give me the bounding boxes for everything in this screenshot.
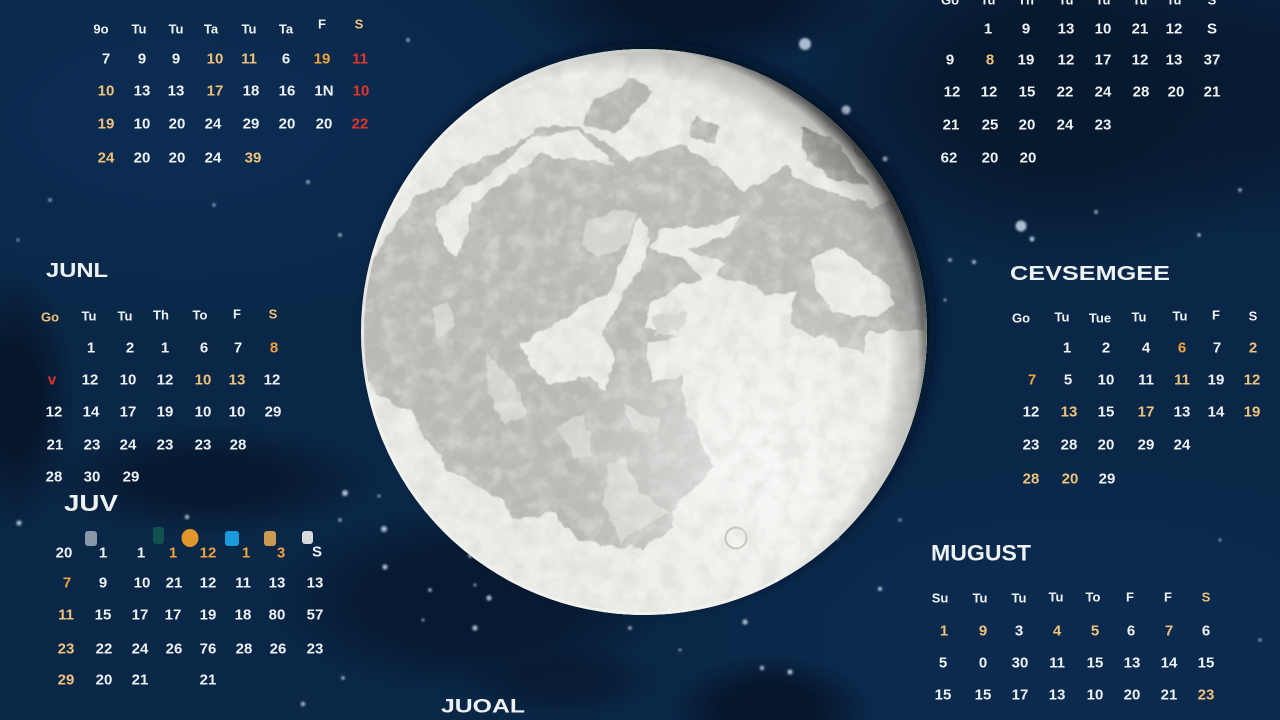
moon: [361, 49, 927, 615]
calendar: top left: S: [355, 16, 364, 32]
calendar: August: 9: [979, 622, 987, 640]
calendar: top right: 23: [1095, 116, 1111, 134]
calendar: September: 19: [1208, 372, 1224, 388]
calendar: July: 28: [236, 640, 252, 658]
calendar: July: 21: [166, 574, 182, 592]
calendar: top right: 17: [1095, 52, 1111, 68]
bright highlands and rays: [365, 49, 927, 615]
month title: MUGUST: [931, 540, 1032, 566]
calendar: September: Go: [1012, 310, 1030, 326]
bright left rim: [362, 50, 926, 614]
calendar: September: [1010, 263, 1260, 488]
surface mottling: [360, 48, 930, 618]
calendar: July: 12: [200, 574, 216, 592]
calendar: September: Tu: [1173, 308, 1188, 324]
calendar: July: 24: [132, 640, 149, 658]
calendar: August: 10: [1087, 686, 1103, 704]
calendar: top left: 6: [282, 50, 290, 68]
calendar: July: 21: [200, 672, 216, 688]
calendar: August: To: [1086, 590, 1101, 604]
calendar: top right: 28: [1133, 84, 1149, 100]
calendar: top left: 24: [98, 150, 115, 166]
calendar: July: 10: [134, 574, 150, 592]
calendar: June: S: [269, 306, 278, 322]
bright centre of highlands: [608, 323, 856, 560]
calendar: August: 6: [1127, 622, 1135, 640]
calendar: top right: 19: [1018, 52, 1034, 68]
calendar: August: 21: [1161, 686, 1177, 704]
month title: JUV: [64, 490, 119, 516]
calendar: June: Tu: [118, 308, 133, 324]
calendar: July: 1: [242, 544, 250, 562]
calendar: July: 20: [96, 672, 112, 688]
calendar: September: 1: [1063, 340, 1071, 356]
calendar: July: 13: [269, 574, 285, 592]
calendar: September: 29: [1138, 436, 1154, 454]
calendar: top left: F: [318, 16, 326, 32]
calendar: July: 57: [307, 606, 323, 624]
calendar: August: 20: [1124, 686, 1140, 704]
calendar: August: Tu: [973, 590, 988, 606]
calendar: June: 6: [200, 340, 208, 356]
calendar: top left: 9o: [93, 22, 109, 36]
calendar: September: 11: [1174, 372, 1190, 388]
calendar: June: 10: [120, 372, 136, 388]
calendar: top left: 20: [316, 116, 332, 132]
calendar: top left: Ta: [204, 22, 219, 36]
calendar: top left: 7: [102, 50, 110, 68]
calendar: June: 12: [157, 372, 173, 388]
calendar: September: 24: [1174, 436, 1191, 454]
calendar: August: 11: [1049, 654, 1065, 672]
calendar: September: Tue: [1089, 310, 1111, 326]
calendar: top right: 24: [1095, 84, 1112, 100]
calendar: top right: 12: [1132, 52, 1148, 68]
calendar: June: Th: [153, 308, 169, 322]
month title: CEVSEMGEE: [1010, 263, 1170, 285]
calendar: June: F: [233, 306, 241, 322]
calendar: September: 5: [1064, 372, 1072, 388]
crater ring: [726, 528, 746, 548]
calendar: August: 7: [1165, 622, 1173, 640]
calendar: August: 5: [1091, 622, 1099, 640]
calendar: top left: 22: [352, 116, 368, 132]
calendar: September: S: [1249, 308, 1258, 324]
calendar: July: 17: [165, 606, 181, 624]
calendar: top left: 13: [134, 82, 150, 100]
calendar: July: 1: [99, 544, 107, 562]
calendar: top right: 13: [1058, 20, 1074, 38]
calendar: July: 26: [166, 640, 182, 658]
calendar: September: 7: [1028, 372, 1036, 388]
calendar: July: [56, 490, 323, 688]
calendar: September: 11: [1138, 372, 1154, 388]
calendar: August: 14: [1161, 654, 1178, 672]
calendar: August: 17: [1012, 686, 1028, 704]
calendar: July: 1: [169, 544, 177, 562]
calendar: top right: 37: [1204, 52, 1220, 68]
calendar: July: 80: [269, 606, 285, 624]
calendar: September: Tu: [1132, 310, 1147, 324]
calendar: September: 14: [1208, 404, 1225, 420]
calendar: June: 28: [46, 468, 62, 486]
calendar: top left: Ta: [279, 22, 294, 36]
calendar: August: S: [1202, 590, 1211, 604]
calendar: September: 7: [1213, 340, 1221, 356]
calendar: top right: 20: [1019, 116, 1035, 134]
calendar: top left: 10: [353, 82, 369, 100]
calendar: top left: Tu: [132, 22, 147, 36]
calendar: August: F: [1164, 590, 1172, 604]
calendar: July: 29: [58, 672, 74, 688]
calendar: June: 12: [264, 372, 280, 388]
calendar: June: 1: [87, 340, 95, 356]
calendar: top right: 21: [943, 116, 959, 134]
mid-tone lunar patches: [433, 211, 687, 544]
calendar: September: 13: [1174, 404, 1190, 420]
calendar: July: 17: [132, 606, 148, 624]
calendar: top left: 13: [168, 82, 184, 100]
calendar: top right: 12: [981, 84, 997, 100]
calendar: June: Go: [41, 310, 59, 324]
calendar: June: 10: [229, 404, 245, 420]
calendar: July: 26: [270, 640, 286, 658]
surface grain: [362, 78, 924, 548]
calendar: June: 10: [195, 404, 211, 420]
calendar: top left: 24: [205, 116, 222, 132]
calendar: top left: 20: [134, 150, 150, 166]
calendar: August: 0: [979, 654, 987, 672]
calendar: August: 15: [1198, 654, 1214, 672]
calendar: top left: 10: [207, 50, 223, 68]
calendar: June: v: [48, 372, 57, 388]
calendar: July: 18: [235, 606, 251, 624]
calendar: July: 13: [307, 574, 323, 592]
calendar: top right: [941, 0, 1220, 166]
calendar: September: 28: [1061, 436, 1077, 454]
calendar: August: Su: [932, 590, 948, 606]
calendar: July: 9: [99, 574, 107, 592]
calendar: September: 29: [1099, 470, 1115, 488]
calendar: top left: 29: [243, 116, 259, 132]
calendar: top left: 17: [207, 82, 223, 100]
calendar: June: 29: [123, 468, 139, 486]
calendar: top left: 20: [169, 150, 185, 166]
calendar: top left: Tu: [242, 22, 257, 36]
calendar: September: 17: [1138, 404, 1154, 420]
colored header chips: [85, 527, 313, 547]
calendar: June: 17: [120, 404, 136, 420]
calendar: top left: 11: [241, 50, 257, 68]
calendar: top right: 20: [1168, 84, 1184, 100]
calendar: top left: 10: [98, 82, 114, 100]
calendar: August: 15: [975, 686, 991, 704]
calendar: top left: 39: [245, 150, 261, 166]
calendar: September: Tu: [1055, 310, 1070, 324]
calendar: September: 19: [1244, 404, 1260, 420]
calendar: June: Tu: [82, 308, 97, 324]
calendar: top left: 20: [279, 116, 295, 132]
calendar: July: 7: [63, 574, 71, 592]
calendar: July: 3: [277, 544, 285, 562]
calendar: July: 20: [56, 544, 72, 562]
calendar: top right: 22: [1057, 84, 1073, 100]
calendar: July: 11: [235, 574, 251, 592]
calendar: June: 8: [270, 340, 278, 356]
calendar: July: 1: [137, 544, 145, 562]
calendar: August: [931, 540, 1214, 704]
calendar: June: 19: [157, 404, 173, 420]
calendar: September: 15: [1098, 404, 1114, 420]
lunar maria accents: [582, 76, 869, 185]
calendar: top right: 62: [941, 150, 957, 166]
calendar: top right: 21: [1132, 20, 1148, 38]
calendar: June: 2: [126, 340, 134, 356]
calendar: June: 1: [161, 340, 169, 356]
calendar: June: To: [193, 308, 208, 322]
calendar: June: 7: [234, 340, 242, 356]
calendar: September: 12: [1244, 372, 1260, 388]
calendar: top right: 12: [1166, 20, 1182, 38]
calendar: June: 23: [195, 436, 211, 454]
calendar: September: 13: [1061, 404, 1077, 420]
calendar: July: 23: [307, 640, 323, 658]
calendar: top right: 13: [1166, 52, 1182, 68]
calendar: top right: 21: [1204, 84, 1220, 100]
calendar: June: [41, 260, 281, 486]
moon shadow halo: [370, 43, 934, 607]
calendar: July: 76: [200, 640, 216, 658]
calendar: top right: 10: [1095, 20, 1111, 38]
calendar: June: 23: [157, 436, 173, 454]
calendar: top left: 20: [169, 116, 185, 132]
calendar: top left: 18: [243, 82, 259, 100]
calendar: August: 1: [940, 622, 948, 640]
calendar: top right: 12: [944, 84, 960, 100]
calendar: top left: 11: [352, 50, 368, 68]
calendar: top right: 20: [1020, 150, 1036, 166]
calendar: top left: 9: [138, 50, 146, 68]
calendar: September: 20: [1062, 470, 1078, 488]
calendar: July: S: [312, 544, 322, 560]
calendar: top right: S: [1207, 20, 1217, 38]
calendar: July: 21: [132, 672, 148, 688]
calendar: June: 12: [82, 372, 98, 388]
calendar: July: 11: [58, 606, 74, 624]
calendar: September: 6: [1178, 340, 1186, 356]
calendar: June: 13: [229, 372, 245, 388]
calendar: August: 6: [1202, 622, 1210, 640]
calendar: top right: 24: [1057, 116, 1074, 134]
calendar: August: Tu: [1012, 590, 1027, 606]
calendar: top right: 12: [1058, 52, 1074, 68]
calendar: top right: 25: [982, 116, 998, 134]
calendar: June: 12: [46, 404, 62, 420]
calendar: September: 20: [1098, 436, 1114, 454]
calendar: August: 23: [1198, 686, 1214, 704]
calendar: top right: 20: [982, 150, 998, 166]
calendar: top right: 9: [1022, 20, 1030, 38]
calendar: top left: 9: [172, 50, 180, 68]
calendar: August: 15: [1087, 654, 1103, 672]
calendar: July: 15: [95, 606, 111, 624]
calendar: top left: [93, 16, 369, 166]
calendar: September: 2: [1249, 340, 1257, 356]
calendar: September: F: [1212, 308, 1220, 322]
calendar: August: F: [1126, 590, 1134, 604]
limb shading: [498, 49, 927, 568]
calendar: top left: 1N: [314, 82, 334, 100]
calendar: top left: 19: [314, 50, 330, 68]
calendar: July: 22: [96, 640, 112, 658]
calendar: June: 21: [47, 436, 63, 454]
calendar: top right: 15: [1019, 84, 1035, 100]
calendar: June: 28: [230, 436, 246, 454]
calendar: September: 4: [1142, 340, 1151, 356]
calendar: July: 23: [58, 640, 74, 658]
calendar: September: 2: [1102, 340, 1110, 356]
calendar: August: Tu: [1049, 590, 1064, 604]
calendar: June: 14: [83, 404, 100, 420]
calendar: September: 12: [1023, 404, 1039, 420]
calendar: June: 23: [84, 436, 100, 454]
calendar: top right: 8: [986, 52, 994, 68]
calendar: top left: 16: [279, 82, 295, 100]
calendar: June: 10: [195, 372, 211, 388]
month title: JUNL: [46, 260, 108, 282]
calendar: top left: 24: [205, 150, 222, 166]
calendar: top left: 19: [98, 116, 114, 132]
calendar: top left: 10: [134, 116, 150, 132]
calendar: August: 5: [939, 654, 947, 672]
calendar: August: 15: [935, 686, 951, 704]
calendar: August: 13: [1049, 686, 1065, 704]
calendar: August: 13: [1124, 654, 1140, 672]
month title: bottom center: JUOAL: [441, 696, 525, 718]
calendar: top right: 1: [984, 20, 992, 38]
calendar: July: 19: [200, 606, 216, 624]
calendar: September: 10: [1098, 372, 1114, 388]
calendar: September: 28: [1023, 470, 1039, 488]
calendar: August: 3: [1015, 622, 1023, 640]
calendar: June: 24: [120, 436, 137, 454]
calendar: June: 29: [265, 404, 281, 420]
calendar: July: 12: [200, 544, 216, 562]
calendar: August: 4: [1053, 622, 1062, 640]
calendar: top left: Tu: [169, 22, 184, 36]
calendar: August: 30: [1012, 654, 1028, 672]
calendar: September: 23: [1023, 436, 1039, 454]
calendar: top right: 9: [946, 52, 954, 68]
calendar: June: 30: [84, 468, 100, 486]
